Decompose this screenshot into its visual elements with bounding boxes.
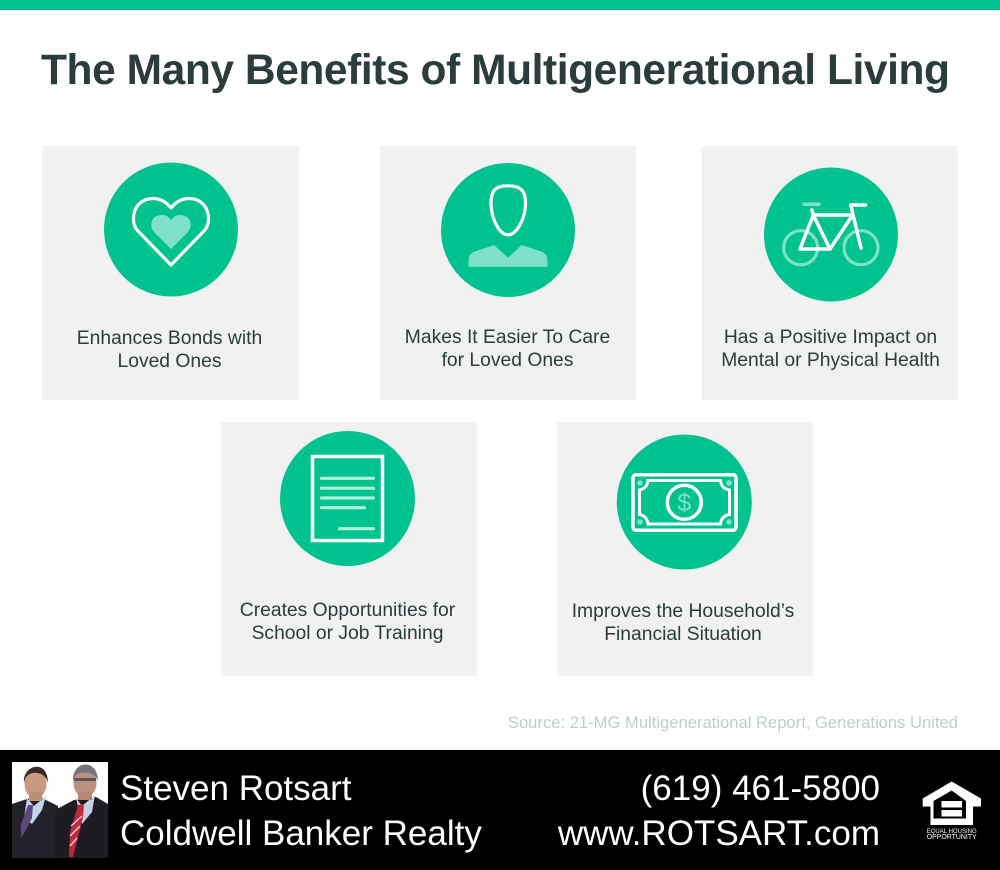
- footer band: [0, 750, 1000, 870]
- panel: positive impact: [702, 146, 958, 400]
- caption: Makes It Easier To Care: [405, 327, 610, 348]
- left man: [12, 798, 62, 858]
- panel: enhances bonds: [42, 146, 299, 400]
- caption: for Loved Ones: [442, 350, 573, 371]
- icon: document: [280, 431, 415, 566]
- caption: Enhances Bonds with: [77, 328, 262, 349]
- icon: banknote: [617, 434, 752, 570]
- equal housing logo: OPPORTUNITY: [927, 834, 977, 841]
- icon: person: [441, 163, 575, 297]
- caption: School or Job Training: [252, 623, 443, 644]
- caption: Improves the Household’s: [572, 601, 794, 622]
- company name: Coldwell Banker Realty: [120, 814, 482, 853]
- equal housing logo: EQUAL HOUSING: [927, 828, 977, 835]
- agent name: Steven Rotsart: [120, 769, 352, 808]
- caption: Creates Opportunities for: [240, 600, 456, 621]
- right man: [55, 797, 108, 858]
- caption: Financial Situation: [604, 624, 762, 645]
- panel: easier to care: [380, 146, 636, 400]
- icon: banknote: $: [677, 489, 691, 517]
- icon: heart: [104, 162, 238, 296]
- icon: bicycle: [764, 168, 898, 302]
- panel: financial situation: [557, 422, 813, 676]
- title: The Many Benefits of Multigenerational Living: [41, 47, 950, 94]
- agent photo: [12, 762, 108, 858]
- panel: school or job training: [221, 422, 477, 676]
- caption: Loved Ones: [118, 351, 221, 372]
- source note: Source: 21-MG Multigenerational Report, Generations United: [508, 713, 958, 732]
- caption: Has a Positive Impact on: [724, 327, 937, 348]
- top accent bar: [0, 0, 1000, 10]
- website: www.ROTSART.com: [557, 814, 880, 853]
- caption: Mental or Physical Health: [721, 350, 940, 371]
- phone number: (619) 461-5800: [641, 769, 880, 808]
- equal housing logo: [923, 782, 981, 841]
